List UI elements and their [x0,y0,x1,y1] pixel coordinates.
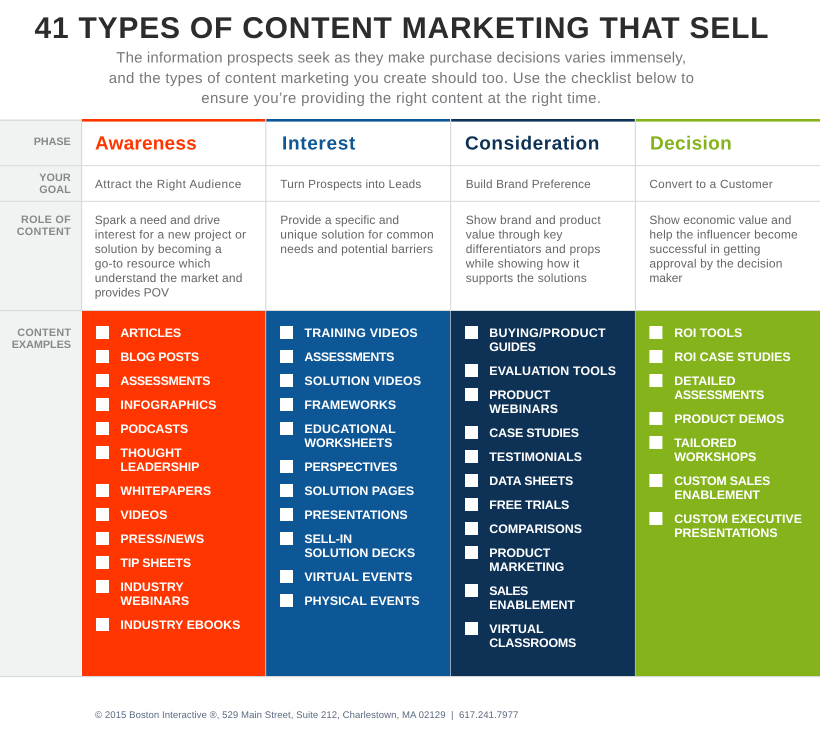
role text: Decision: successful in getting [649,242,760,256]
role text: Decision: Show economic value and [649,213,791,227]
item: Assessments: ASSESSMENTS [304,350,394,364]
goal: Awareness: Attract the Right Audience [95,177,242,191]
role text: Consideration [465,213,601,285]
role text: Decision: maker [649,271,682,285]
item: Training Videos: TRAINING VIDEOS [304,326,418,340]
role text: Interest: unique solution for common [280,228,434,242]
item: Buying/Product Guides [465,326,606,354]
role text: Decision [649,213,798,285]
item: Tailored Workshops [649,436,756,464]
item: Testimonials: TESTIMONIALS [489,450,582,464]
item: Solution Pages: SOLUTION PAGES [304,484,414,498]
item: Custom Executive Presentations: CUSTOM EXECUTIVE [674,512,802,526]
role text: Decision: approval by the decision [649,256,782,270]
item: Sales Enablement: SALES [489,584,528,598]
row label: phase: PHASE [34,136,71,148]
role text: Consideration: Show brand and product [466,213,601,227]
row label: content examples [12,327,71,351]
item: Evaluation Tools: EVALUATION TOOLS [489,364,616,378]
row label: role of content [17,214,71,238]
item: Product Demos: PRODUCT DEMOS [674,412,784,426]
item: Frameworks: FRAMEWORKS [304,398,396,412]
item: Physical Events: PHYSICAL EVENTS [304,594,420,608]
item: Virtual Classrooms: CLASSROOMS [489,636,576,650]
item: Industry Webinars [96,580,189,608]
item: Industry Webinars: WEBINARS [120,594,189,608]
item: Tip Sheets: TIP SHEETS [120,556,191,570]
item: Thought Leadership [96,446,199,474]
role text: Awareness: solution by becoming a [95,242,222,256]
title: 41 TYPES OF CONTENT MARKETING THAT SELL [34,12,768,45]
item: Case Studies: CASE STUDIES [489,426,579,440]
item: Virtual Events: VIRTUAL EVENTS [304,570,412,584]
role text: Decision: help the influencer become [649,228,798,242]
item: Detailed Assessments: ASSESSMENTS [674,388,764,402]
item: Sell-in Solution Decks: SELL-IN [304,532,352,546]
item: Infographics: INFOGRAPHICS [120,398,216,412]
item: Product Marketing: MARKETING [489,560,564,574]
item: Custom Sales Enablement [649,474,770,502]
role text: Awareness: Spark a need and drive [95,213,220,227]
item: Detailed Assessments [649,374,764,402]
goal: Decision: Convert to a Customer [649,177,773,191]
row label: your goal: YOUR [39,172,71,184]
item: Product Marketing [465,546,564,574]
item: Educational Worksheets: EDUCATIONAL [304,422,396,436]
column: Decision [636,119,820,676]
item: ROI Tools: ROI TOOLS [674,326,742,340]
item: Sales Enablement [465,584,575,612]
panel: Consideration content examples [451,311,635,676]
role text: Awareness: interest for a new project or [95,228,246,242]
item: Custom Executive Presentations [649,512,802,540]
item: Whitepapers: WHITEPAPERS [120,484,211,498]
item: Custom Sales Enablement: CUSTOM SALES [674,474,770,488]
item: Educational Worksheets [280,422,396,450]
item: Comparisons: COMPARISONS [489,522,582,536]
role text: Awareness [95,213,246,300]
row label: content examples: CONTENT [17,327,71,339]
column: Interest [266,119,450,676]
item: Industry Webinars: INDUSTRY [120,580,184,594]
role text: Consideration: supports the solutions [466,271,587,285]
item: Perspectives: PERSPECTIVES [304,460,397,474]
phase heading: Interest: Interest [282,133,356,154]
item: Sell-in Solution Decks [280,532,415,560]
item: Blog Posts: BLOG POSTS [120,350,199,364]
item: Assessments: ASSESSMENTS [120,374,210,388]
item: Buying/Product Guides: GUIDES [489,340,536,354]
goal: Consideration: Build Brand Preference [466,177,591,191]
item: Virtual Classrooms: VIRTUAL [489,622,544,636]
item: Virtual Classrooms [465,622,576,650]
intro paragraph [109,50,694,107]
item: Presentations: PRESENTATIONS [304,508,408,522]
item: Product Marketing: PRODUCT [489,546,551,560]
row label: your goal [39,172,71,196]
item: Free Trials: FREE TRIALS [489,498,569,512]
item: ROI Case Studies: ROI CASE STUDIES [674,350,791,364]
intro paragraph: ensure you’re providing the right content at the right time. [201,90,601,107]
item: Buying/Product Guides: BUYING/PRODUCT [489,326,606,340]
row labels [12,136,71,351]
role text: Consideration: value through key [466,228,562,242]
phase heading: Decision: Decision [650,133,732,154]
role text: Consideration: while showing how it [465,256,580,270]
item: Product Webinars: PRODUCT [489,388,551,402]
item: Thought Leadership: THOUGHT [120,446,182,460]
item: Data Sheets: DATA SHEETS [489,474,573,488]
item: Videos: VIDEOS [120,508,167,522]
item: Industry Ebooks: INDUSTRY EBOOKS [120,618,240,632]
item: Articles: ARTICLES [120,326,181,340]
column: Consideration [451,119,635,676]
item: Educational Worksheets: WORKSHEETS [304,436,392,450]
row label: your goal: GOAL [39,184,71,196]
row label: role of content: CONTENT [17,226,71,238]
panel: Interest content examples [266,311,450,676]
role text: Interest: Provide a specific and [280,213,399,227]
column: Awareness [82,119,265,676]
role text: Awareness: provides POV [95,286,169,300]
panel: Decision content examples [636,311,820,676]
row label: role of content: ROLE OF [21,214,71,226]
item: Thought Leadership: LEADERSHIP [120,460,199,474]
item: Videos [96,508,167,522]
footer: © 2015 Boston Interactive ®, 529 Main Street, Suite 212, Charlestown, MA 02129 | 617.241.7977 [95,710,518,721]
item: Product Webinars [465,388,558,416]
row label: content examples: EXAMPLES [12,339,71,351]
phase heading: Awareness: Awareness [95,133,197,154]
item: Podcasts: PODCASTS [120,422,188,436]
item: Tailored Workshops: TAILORED [674,436,737,450]
role text: Interest: needs and potential barriers [280,242,433,256]
item: Sell-in Solution Decks: SOLUTION DECKS [304,546,415,560]
item: Detailed Assessments: DETAILED [674,374,736,388]
item: Tailored Workshops: WORKSHOPS [674,450,756,464]
item: Product Webinars: WEBINARS [489,402,558,416]
intro paragraph: and the types of content marketing you create should too. Use the checklist below to [109,70,694,87]
goal: Interest: Turn Prospects into Leads [280,177,421,191]
item: Custom Executive Presentations: PRESENTATIONS [674,526,778,540]
role text: Interest [280,213,434,256]
item: Sales Enablement: ENABLEMENT [489,598,575,612]
role text: Awareness: go-to resource which [95,256,210,270]
phase heading: Consideration: Consideration [465,133,599,154]
panel: Awareness content examples [82,311,265,676]
role text: Awareness: understand the market and [95,271,242,285]
item: Solution Videos: SOLUTION VIDEOS [304,374,421,388]
item: Press/News: PRESS/NEWS [120,532,204,546]
left label column background [0,120,81,676]
item: Custom Sales Enablement: ENABLEMENT [674,488,760,502]
role text: Consideration: differentiators and props [466,242,600,256]
intro paragraph: The information prospects seek as they make purchase decisions varies immensely, [116,50,686,67]
